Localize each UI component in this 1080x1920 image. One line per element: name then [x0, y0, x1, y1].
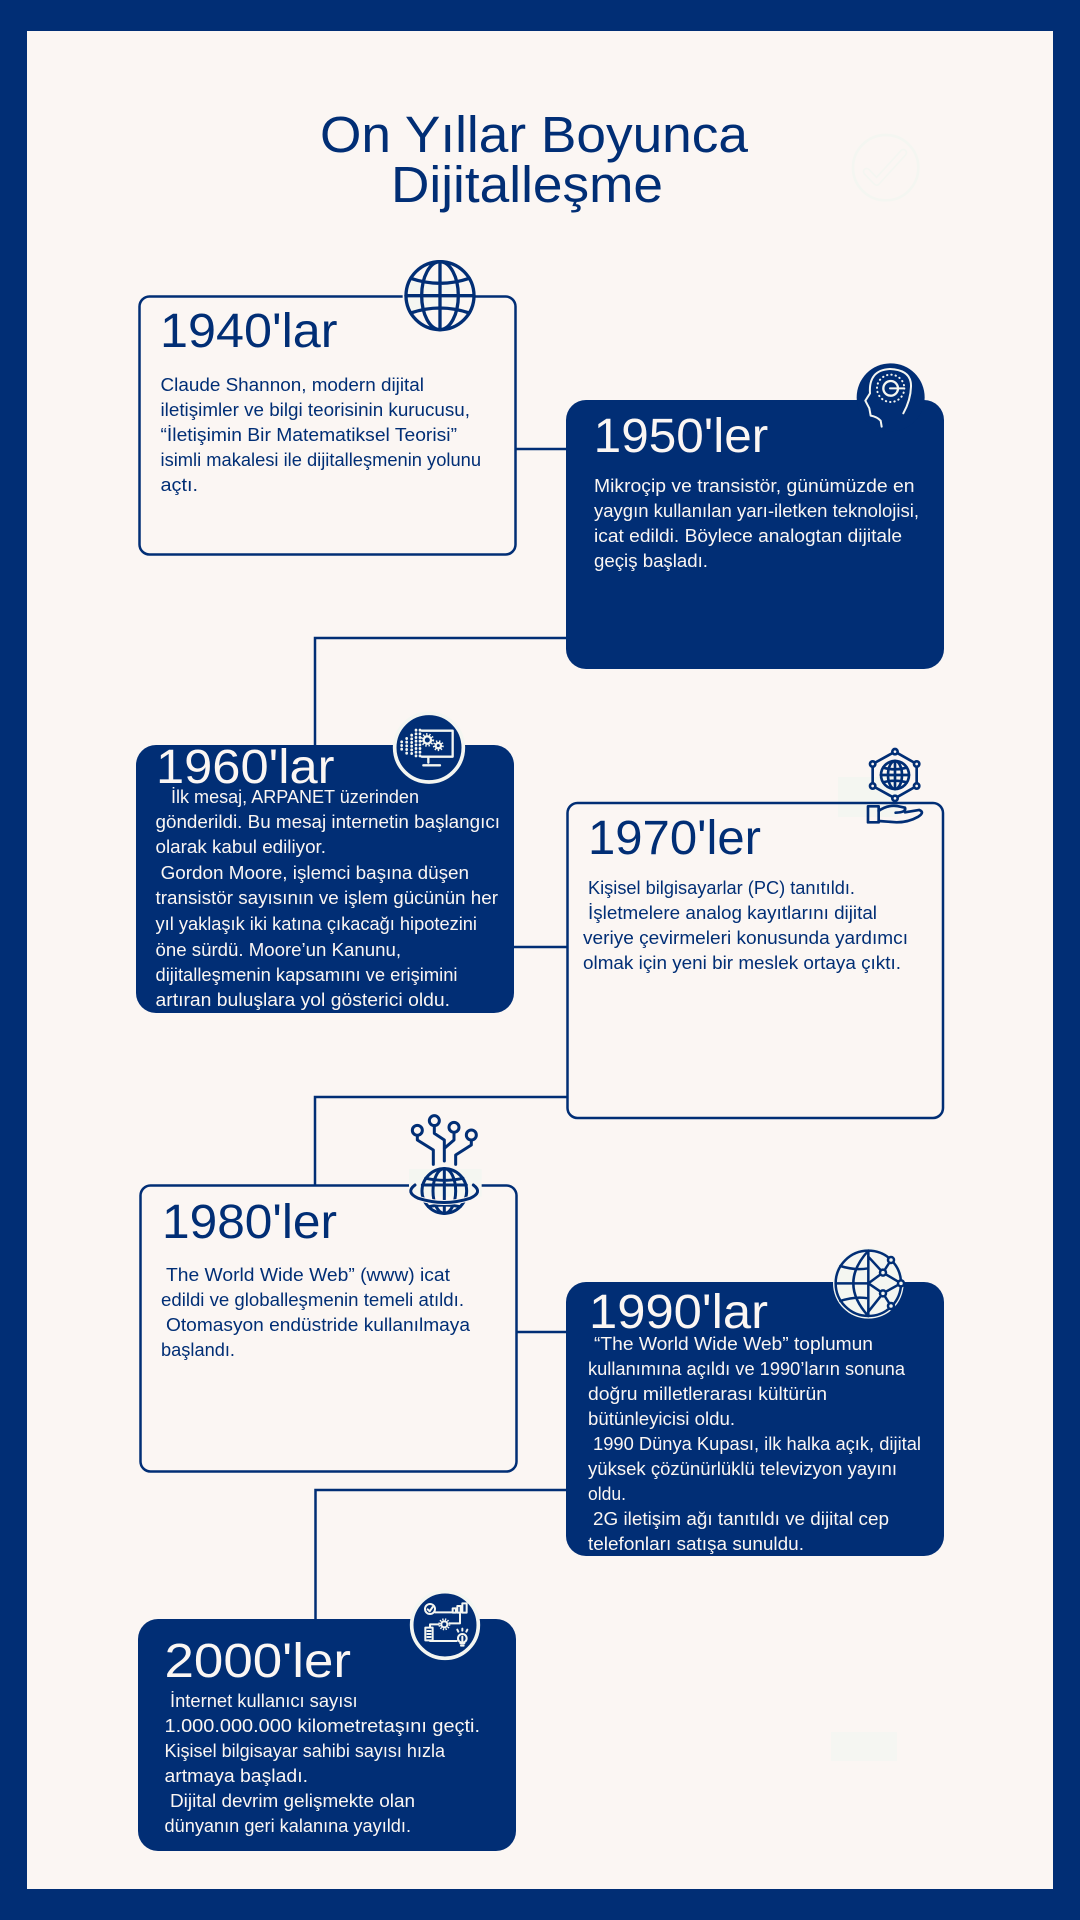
body text: artıran buluşlara yol gösterici oldu. — [156, 990, 450, 1010]
panel: 1940s — [140, 260, 516, 554]
card box — [140, 296, 516, 554]
heading: 2000'ler — [164, 1635, 351, 1688]
title — [320, 106, 749, 213]
heading: 1990'lar — [589, 1286, 768, 1339]
body text: iletişimler ve bilgi teorisinin kurucusu, — [160, 400, 470, 420]
heading: 1940'lar — [160, 305, 338, 358]
body text: İşletmelere analog kayıtlarını dijital — [588, 903, 877, 923]
body text: 1990 Dünya Kupası, ilk halka açık, dijital — [593, 1434, 921, 1454]
title: Dijitalleşme — [391, 156, 663, 213]
connector: 1990 to 2000 — [316, 1490, 566, 1619]
body text — [160, 375, 481, 495]
body text: açtı. — [160, 475, 198, 495]
faint decorative block — [831, 1732, 897, 1761]
body text — [594, 476, 919, 571]
body text: doğru milletlerarası kültürün — [588, 1384, 827, 1404]
icon: process flow — [412, 1592, 478, 1658]
panel: 1960s — [136, 713, 514, 1013]
body text: Gordon Moore, işlemci başına düşen — [161, 863, 469, 883]
body text: oldu. — [588, 1484, 626, 1504]
body text: olmak için yeni bir meslek ortaya çıktı. — [583, 953, 901, 973]
icon: network globe on hand — [868, 749, 922, 822]
body text: 2G iletişim ağı tanıtıldı ve dijital cep — [593, 1509, 889, 1529]
card box — [140, 1186, 516, 1472]
body text: olarak kabul ediliyor. — [156, 837, 326, 857]
body text: Claude Shannon, modern dijital — [160, 375, 424, 395]
body text — [156, 787, 500, 1010]
body text: gönderildi. Bu mesaj internetin başlangıcı — [156, 812, 500, 832]
body text: İnternet kullanıcı sayısı — [170, 1691, 358, 1711]
icon: globe with circuits — [409, 1116, 482, 1217]
body text: öne sürdü. Moore’un Kanunu, — [156, 940, 401, 960]
body text: “İletişimin Bir Matematiksel Teorisi” — [160, 425, 457, 445]
body text — [583, 878, 908, 973]
icon: computer with gears — [395, 713, 463, 782]
body text: bütünleyicisi oldu. — [588, 1409, 735, 1429]
connector: 1980 to 1990 — [517, 1331, 566, 1333]
body text: telefonları satışa sunuldu. — [588, 1534, 804, 1554]
connector: 1960 to 1970 — [514, 946, 567, 948]
panel: 2000s — [138, 1592, 516, 1851]
panel: 1980s — [140, 1116, 516, 1472]
body text — [588, 1334, 921, 1554]
connector: 1940 to 1950 — [516, 448, 566, 450]
heading: 1970'ler — [588, 812, 761, 865]
body text: Kişisel bilgisayarlar (PC) tanıtıldı. — [588, 878, 855, 898]
body text: Dijital devrim gelişmekte olan — [170, 1791, 415, 1811]
heading: 1960'lar — [156, 741, 335, 794]
body text: artmaya başladı. — [164, 1766, 308, 1786]
body text: Otomasyon endüstride kullanılmaya — [166, 1315, 471, 1335]
body text: The World Wide Web” (www) icat — [166, 1265, 450, 1285]
body text: isimli makalesi ile dijitalleşmenin yolunu — [160, 450, 481, 470]
body text: transistör sayısının ve işlem gücünün her — [156, 888, 498, 908]
title: On Yıllar Boyunca — [320, 106, 749, 163]
body text: kullanımına açıldı ve 1990’ların sonuna — [588, 1359, 906, 1379]
card box — [138, 1619, 516, 1851]
icon: head with gear — [857, 363, 925, 431]
card box — [136, 745, 514, 1013]
connector: 1950 to 1960 — [315, 638, 566, 745]
body text: Kişisel bilgisayar sahibi sayısı hızla — [164, 1741, 446, 1761]
body text: “The World Wide Web” toplumun — [594, 1334, 873, 1354]
panel: 1970s — [568, 749, 943, 1118]
body text — [164, 1691, 480, 1836]
heading: 1950'ler — [594, 410, 768, 463]
heading: 1980'ler — [162, 1196, 337, 1249]
card box — [566, 1282, 944, 1556]
panel: 1990s — [566, 1248, 944, 1556]
pale block behind icon — [838, 777, 898, 817]
body text: geçiş başladı. — [594, 551, 708, 571]
body text: icat edildi. Böylece analogtan dijitale — [594, 526, 902, 546]
card box — [566, 400, 944, 669]
icon: globe — [403, 260, 474, 330]
body text — [161, 1265, 471, 1360]
icon: globe with network nodes — [833, 1248, 904, 1319]
panel: 1950s — [566, 363, 944, 669]
body text: dünyanın geri kalanına yayıldı. — [164, 1816, 411, 1836]
body text: 1.000.000.000 kilometretaşını geçti. — [164, 1716, 480, 1736]
body text: Mikroçip ve transistör, günümüzde en — [594, 476, 914, 496]
body text: edildi ve globalleşmenin temeli atıldı. — [161, 1290, 464, 1310]
card box — [568, 803, 943, 1118]
body text: başlandı. — [161, 1340, 235, 1360]
body text: dijitalleşmenin kapsamını ve erişimini — [156, 965, 458, 985]
body text: yüksek çözünürlüklü televizyon yayını — [588, 1459, 897, 1479]
icon: faint check mark — [853, 135, 918, 200]
body text: veriye çevirmeleri konusunda yardımcı — [583, 928, 908, 948]
body text: İlk mesaj, ARPANET üzerinden — [171, 787, 419, 807]
connector: 1970 to 1980 — [315, 1097, 567, 1185]
body text: yıl yaklaşık iki katına çıkacağı hipotezini — [156, 914, 477, 934]
body text: yaygın kullanılan yarı-iletken teknolojisi, — [594, 501, 919, 521]
